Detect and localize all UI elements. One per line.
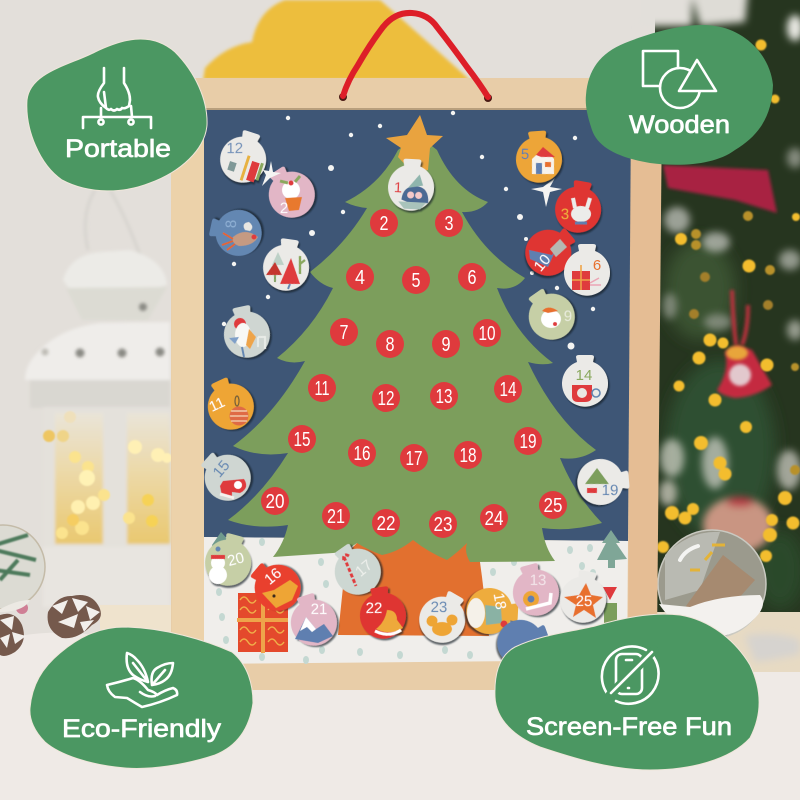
ornament 7: bird xyxy=(218,302,275,364)
badge: Eco-Friendly xyxy=(30,627,253,768)
blob xyxy=(586,25,773,165)
ornament 14: mug xyxy=(562,355,608,407)
red gift box xyxy=(237,590,288,653)
ornament 19: tree xyxy=(576,457,631,507)
badge: Portable xyxy=(27,39,207,191)
icon: hand with sprout xyxy=(107,653,177,707)
icon: hand carrying board xyxy=(83,68,151,128)
ornament 23: mouse: 23 xyxy=(431,599,447,616)
numbered day circles: 7 xyxy=(340,322,348,344)
ornament 9: sheep xyxy=(517,280,584,349)
ornament 11: bauble xyxy=(191,371,262,442)
hanging red rope xyxy=(339,13,492,102)
background: blurred white lantern xyxy=(25,190,172,607)
background: blurred christmas tree xyxy=(640,0,800,612)
ornament 12: candles xyxy=(214,125,274,189)
numbered day circles: 8 xyxy=(386,334,394,356)
small green tree xyxy=(597,530,627,568)
numbered day circles: 6 xyxy=(468,267,476,289)
ornament 14: mug: 14 xyxy=(576,367,592,384)
numbered day circles: 11 xyxy=(314,378,330,400)
ornament 17: candy cane: 17 xyxy=(352,557,376,580)
fairy lights xyxy=(43,411,172,539)
numbered day circles: 15 xyxy=(294,429,310,451)
small tree behind snowman ornament xyxy=(212,532,230,552)
label: Eco-Friendly xyxy=(62,715,222,743)
ornament 6: gift: 6 xyxy=(593,257,601,274)
ornament 24: blue, mostly hidden xyxy=(491,611,555,672)
numbered day circles: 9 xyxy=(442,334,450,356)
numbered day circles: 12 xyxy=(378,388,394,410)
ornament 22: bell: 22 xyxy=(366,600,382,617)
numbered day circles: 16 xyxy=(354,443,370,465)
ornament 8: reindeer xyxy=(206,204,266,260)
ornament 16: deer xyxy=(239,546,319,626)
ornament 23: mouse xyxy=(410,583,476,651)
numbered day circles: 22 xyxy=(376,513,396,535)
ornament 5: house: 5 xyxy=(521,146,529,163)
blob xyxy=(495,614,759,770)
numbered day circles: 10 xyxy=(478,323,496,345)
ornament 11: bauble: 11 xyxy=(206,394,228,416)
label: Portable xyxy=(65,135,171,163)
ornament: tree scene xyxy=(260,236,313,295)
gold star xyxy=(386,115,443,172)
ornament 15: mitten: 15 xyxy=(210,457,233,481)
background: yellow shape behind board xyxy=(203,0,470,80)
numbered day circles xyxy=(261,209,567,538)
left snow globe xyxy=(0,525,45,614)
icon: shapes xyxy=(643,51,716,108)
ornament 17: candy cane xyxy=(323,534,391,604)
snowflake by ornament 2 xyxy=(262,161,281,186)
background: snowy table xyxy=(0,605,800,800)
numbered day circles: 21 xyxy=(327,506,345,528)
icon: no phone xyxy=(602,646,659,704)
badge: Screen-Free Fun xyxy=(495,614,759,770)
night-sky stars xyxy=(222,111,595,350)
numbered day circles: 18 xyxy=(460,445,476,467)
wooden frame xyxy=(171,78,662,690)
label: Screen-Free Fun xyxy=(526,713,732,741)
numbered day circles: 4 xyxy=(355,267,365,289)
numbered day circles: 20 xyxy=(266,491,284,513)
numbered day circles: 19 xyxy=(520,431,536,453)
ornament 5: house xyxy=(514,129,564,184)
ornament 16: deer: 16 xyxy=(261,565,285,588)
ornament 13: snail xyxy=(506,559,564,621)
numbered day circles: 3 xyxy=(444,213,454,235)
small gift behind star ornament xyxy=(603,587,617,623)
ornament 20: snowman: 20 xyxy=(226,549,246,570)
ornament 9: sheep: 9 xyxy=(564,308,572,325)
pine cones xyxy=(0,595,101,656)
snow ground panel xyxy=(204,537,628,664)
ornament 25: star: 25 xyxy=(576,593,592,610)
numbered day circles: 23 xyxy=(434,514,452,536)
snow dots on ground xyxy=(216,538,596,664)
ornament 12: candles: 12 xyxy=(226,140,243,157)
ornament 3: rabbit: 3 xyxy=(561,206,569,223)
ornament 13: snail: 13 xyxy=(530,572,546,589)
blob xyxy=(30,627,253,768)
label: Wooden xyxy=(629,111,730,139)
ornament 2: cupcake xyxy=(257,158,324,228)
navy panel xyxy=(204,110,631,541)
ornament 19: tree: 19 xyxy=(602,482,618,499)
badge: Wooden xyxy=(586,25,773,165)
snowflake star xyxy=(531,178,562,207)
ornament 21: mountain xyxy=(282,588,345,654)
wooden board xyxy=(171,78,662,690)
blob xyxy=(27,39,207,191)
numbered day circles: 17 xyxy=(406,448,422,470)
right snow globe xyxy=(658,530,766,638)
ornament 18: santa: 18 xyxy=(490,592,509,611)
ornament 3: rabbit xyxy=(551,177,606,236)
ornament 10: brush xyxy=(511,217,589,294)
ornament 21: mountain: 21 xyxy=(311,601,327,618)
ornament 25: star xyxy=(556,567,611,626)
ornament 8: reindeer: 8 xyxy=(223,220,240,228)
ornament 22: bell xyxy=(356,584,409,642)
ornament 10: brush: 10 xyxy=(531,251,554,275)
numbered day circles: 25 xyxy=(544,495,562,517)
ornament 20: snowman xyxy=(199,529,258,593)
christmas tree xyxy=(228,135,602,562)
numbered day circles: 5 xyxy=(412,270,420,292)
numbered day circles: 14 xyxy=(500,379,516,401)
numbered day circles: 13 xyxy=(436,386,452,408)
orange tree base xyxy=(338,540,489,636)
ornament 6: gift xyxy=(564,244,610,296)
ornament 15: mitten xyxy=(188,438,267,517)
ornament 1: penguin xyxy=(387,158,435,212)
ornament 1: penguin: 1 xyxy=(393,179,403,197)
ornament 2: cupcake: 2 xyxy=(280,200,288,217)
numbered day circles: 24 xyxy=(484,508,504,530)
ornament 18: santa xyxy=(465,587,519,635)
numbered day circles: 2 xyxy=(380,213,388,235)
